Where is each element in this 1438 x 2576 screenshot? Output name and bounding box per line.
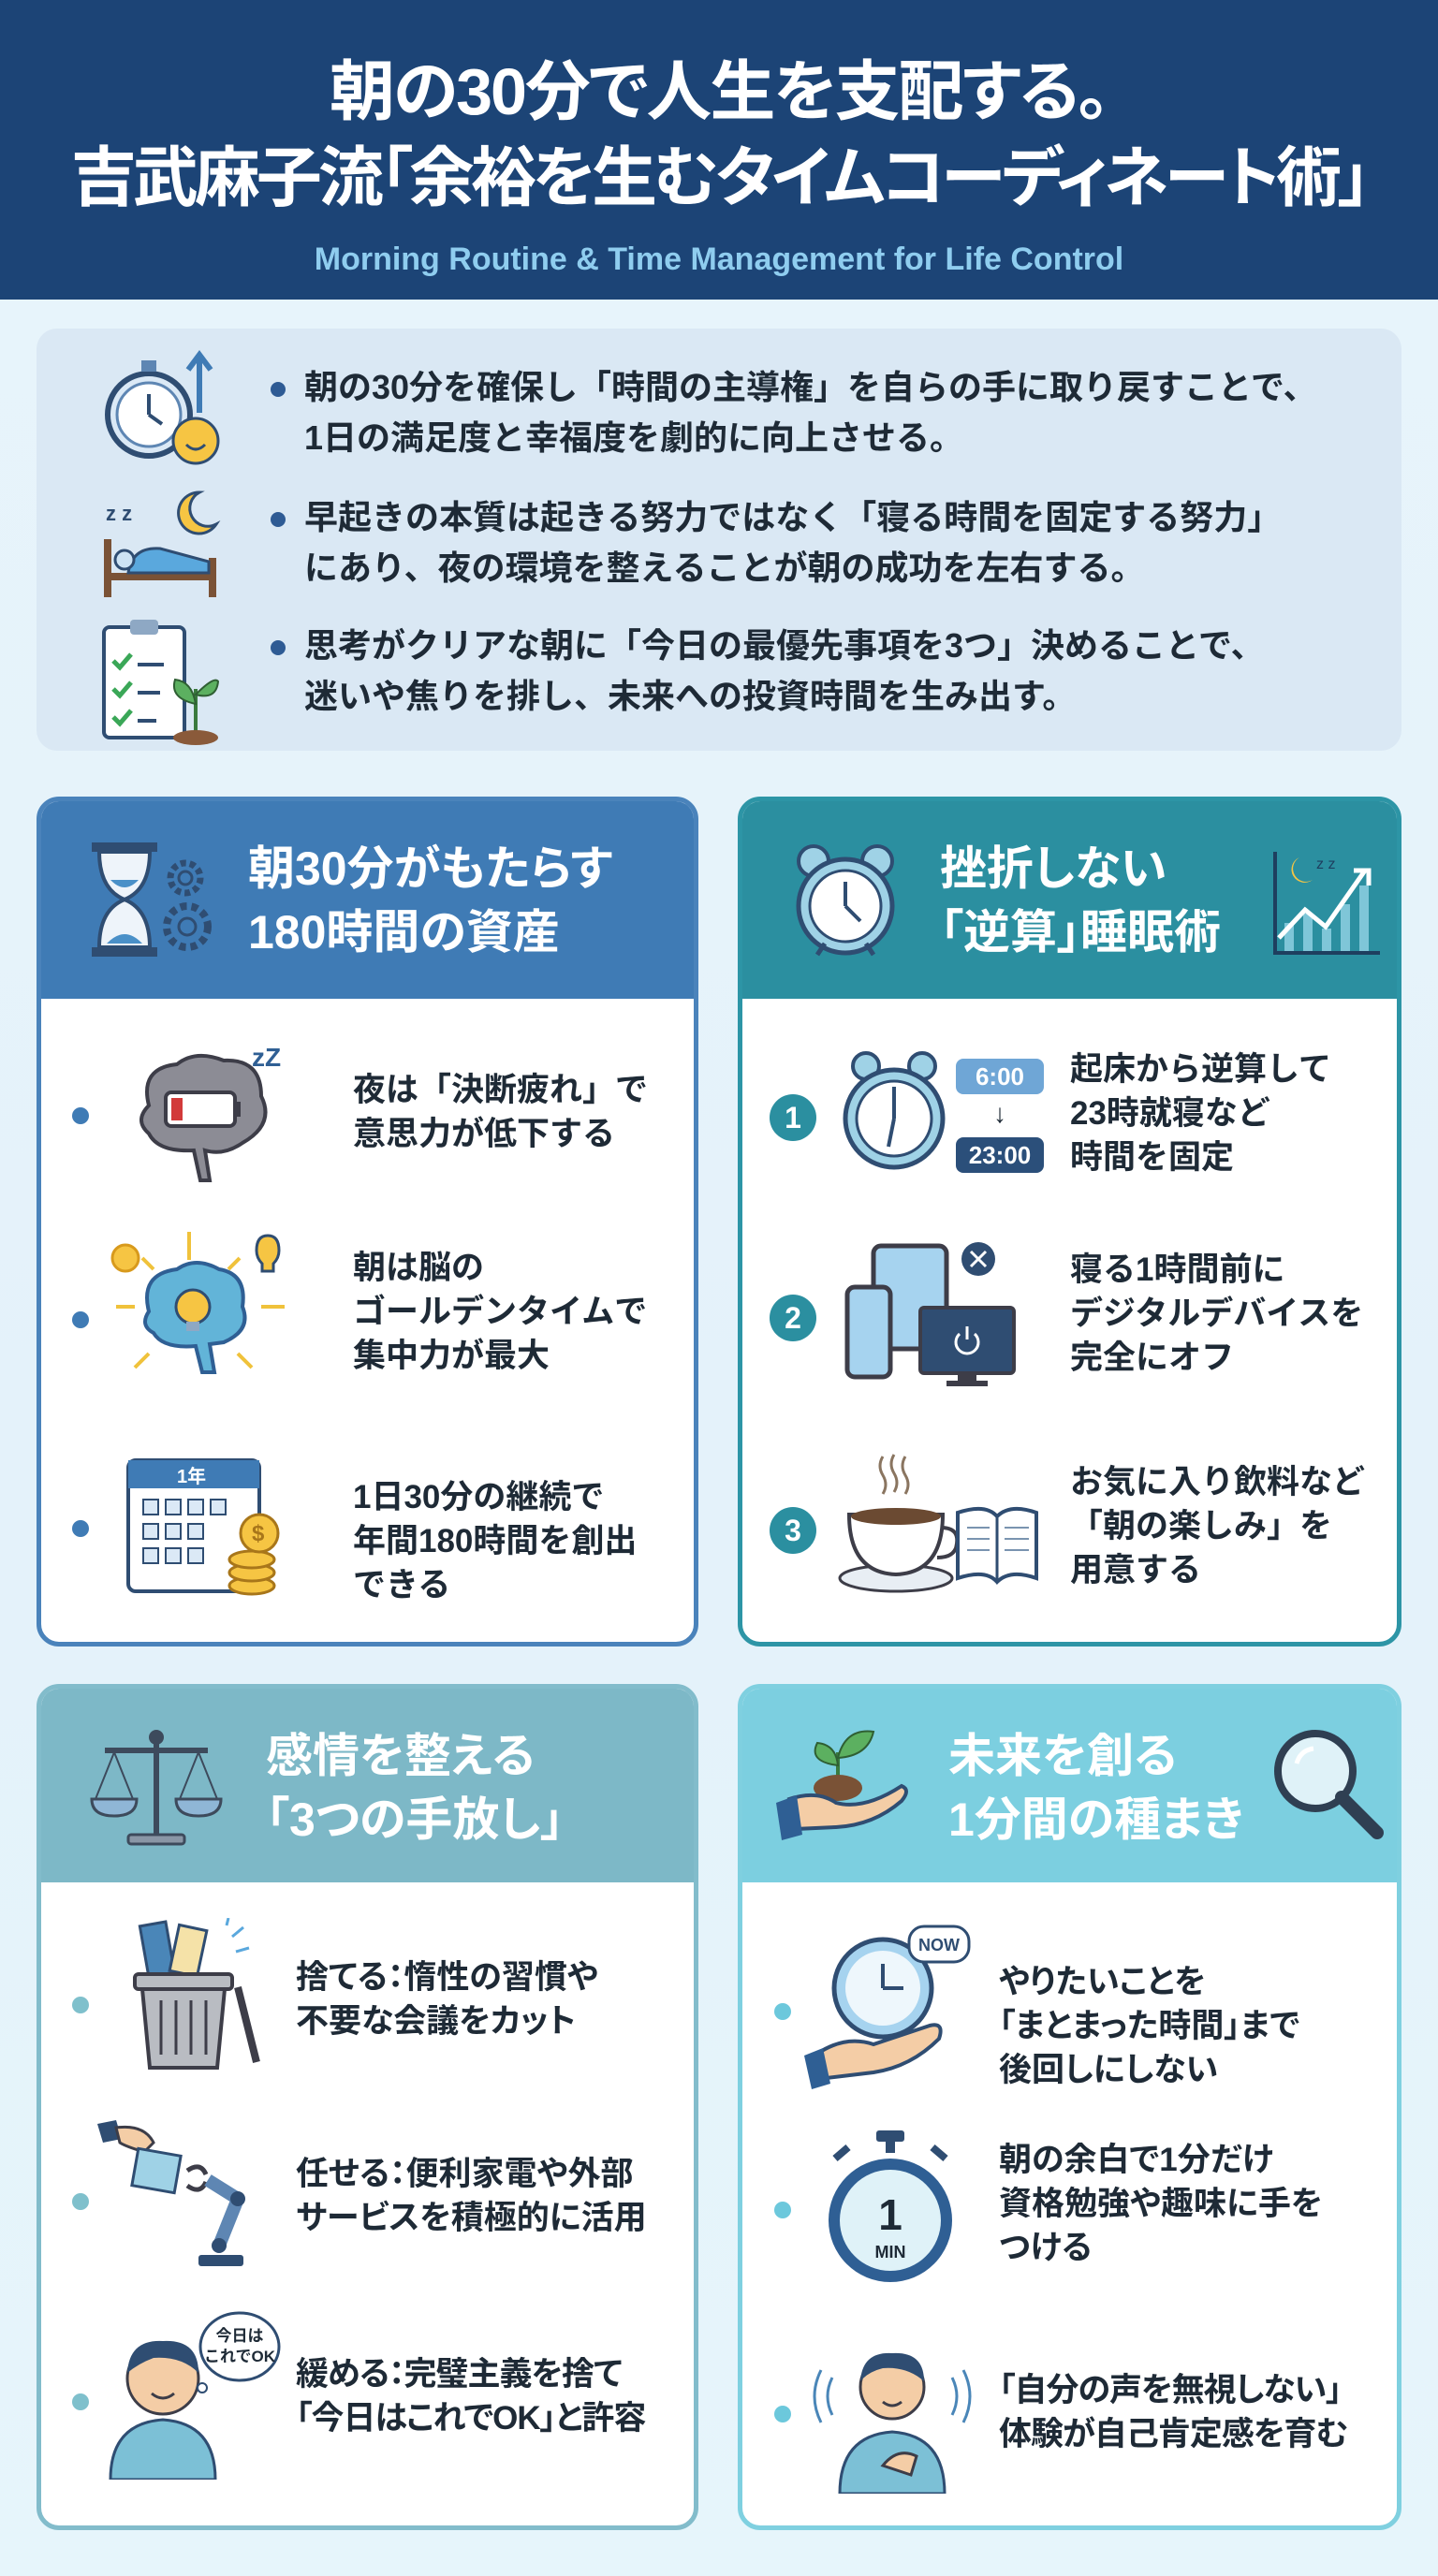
- icon: stopwatch with smile: [105, 350, 219, 464]
- item: 1 minute: 資格勉強や趣味に手を: [999, 2186, 1322, 2222]
- item: throw away: 不要な会議をカット: [296, 2003, 576, 2040]
- panel title: 朝30分がもたらす: [248, 842, 612, 895]
- panel title: 「3つの手放し」: [266, 1793, 564, 1846]
- icon: calendar with coins: [126, 1458, 279, 1595]
- icon: alarm clock: [796, 844, 895, 957]
- icon: sleep chart: z z: [1316, 856, 1335, 872]
- icon: hand to robot arm: [97, 2120, 245, 2266]
- icon: alarm with time boxes: 6:00: [976, 1062, 1024, 1090]
- icon: alarm with time boxes: 23:00: [969, 1141, 1031, 1169]
- item: decision fatigue: 夜は「決断疲れ」で: [353, 1072, 648, 1108]
- item: golden time: 集中力が最大: [353, 1338, 550, 1374]
- icon: clock in hand NOW: NOW: [918, 1936, 960, 1954]
- item 1: 起床から逆算して: [1070, 1051, 1331, 1088]
- item 1: 時間を固定: [1070, 1139, 1234, 1176]
- item: 180 hours per year: 年間180時間を創出: [353, 1523, 637, 1559]
- item: 1 minute: 朝の余白で1分だけ: [999, 2142, 1273, 2178]
- icon: alarm with time boxes: [843, 1051, 1044, 1173]
- icon: person with speech bubble: これでOK: [204, 2348, 276, 2365]
- panel: three letting-go: [37, 1684, 698, 2530]
- item 3: [770, 1454, 1365, 1593]
- item: don't postpone: 「まとまった時間」まで: [999, 2008, 1299, 2044]
- item: golden time: ゴールデンタイムで: [353, 1294, 647, 1330]
- item 3: 用意する: [1070, 1552, 1201, 1588]
- panel title: 未来を創る: [948, 1730, 1177, 1782]
- item: 1 minute: [774, 2130, 1322, 2282]
- item: decision fatigue: 意思力が低下する: [353, 1116, 615, 1152]
- panel: reverse sleep: [738, 797, 1401, 1647]
- icon: magnifying glass: [1274, 1730, 1384, 1839]
- panel header: [742, 1689, 1397, 1882]
- panel header: [41, 801, 694, 999]
- panel title: 「逆算」睡眠術: [940, 906, 1221, 959]
- item: self voice: 体験が自己肯定感を育む: [999, 2416, 1347, 2452]
- panel title: [266, 1730, 564, 1846]
- item 3: 3: [785, 1514, 801, 1547]
- bullet 3: 思考がクリアな朝に「今日の最優先事項を3つ」決めることで、: [304, 626, 1265, 665]
- panel title: [248, 842, 612, 959]
- item: 180 hours per year: できる: [353, 1567, 450, 1603]
- item: don't postpone: [774, 1925, 1299, 2089]
- icon: tired brain: [139, 1043, 281, 1182]
- item: throw away: [72, 1918, 598, 2070]
- panel: 1-minute seeding: [738, 1684, 1401, 2530]
- icon: hand holding sprout: [776, 1730, 908, 1840]
- item 2: 2: [785, 1301, 801, 1335]
- panel title: [940, 842, 1221, 959]
- item: don't postpone: やりたいことを: [999, 1964, 1206, 2000]
- icon: devices off: [844, 1242, 1016, 1386]
- icon: person hand on chest: [813, 2353, 972, 2494]
- item 3: お気に入り飲料など: [1070, 1464, 1365, 1500]
- icon: calendar with coins: 1年: [177, 1466, 206, 1487]
- header band: [0, 0, 1438, 300]
- item 1: 23時就寝など: [1070, 1095, 1270, 1132]
- item 2: 完全にオフ: [1070, 1339, 1234, 1376]
- icon: scales: [90, 1730, 223, 1846]
- item: decision fatigue: [72, 1043, 648, 1182]
- icon: bright brain with bulb: [110, 1232, 285, 1374]
- panel header: [41, 1689, 694, 1882]
- panel title: [948, 1730, 1243, 1846]
- item: delegate: サービスを積極的に活用: [296, 2200, 647, 2236]
- icon: bed with moon: [104, 490, 221, 597]
- panel: 180 hours asset: [37, 797, 698, 1647]
- icon: person with speech bubble: 今日は: [215, 2326, 264, 2345]
- item: loosen: 「今日はこれでOK」と許容: [296, 2400, 645, 2437]
- item 3: 「朝の楽しみ」を: [1070, 1508, 1332, 1544]
- icon: trash can: [133, 1918, 260, 2070]
- item 2: デジタルデバイスを: [1070, 1295, 1363, 1332]
- title line 2: 吉武麻子流「余裕を生むタイムコーディネート術」: [71, 141, 1367, 214]
- item: self voice: 「自分の声を無視しない」: [999, 2372, 1342, 2408]
- title line 1: 朝の30分で人生を支配する。: [330, 55, 1108, 128]
- icon: 1 MIN stopwatch: [829, 2130, 952, 2282]
- bullet 1: [271, 368, 1317, 457]
- bullet 1: 朝の30分を確保し「時間の主導権」を自らの手に取り戻すことで、: [304, 368, 1317, 406]
- item: 180 hours per year: [72, 1458, 637, 1603]
- item: golden time: [72, 1232, 647, 1374]
- panel header: [742, 801, 1397, 999]
- item: self voice: [774, 2353, 1347, 2494]
- item: 1 minute: つける: [999, 2230, 1092, 2266]
- icon: calendar with coins: $: [252, 1521, 265, 1546]
- icon: clock in hand NOW: [804, 1925, 970, 2089]
- item 1: 1: [785, 1101, 801, 1134]
- icon: coffee and book: [839, 1454, 1038, 1593]
- bullet 2: [271, 498, 1281, 587]
- panel title: 180時間の資産: [248, 906, 560, 959]
- item 1: [770, 1051, 1331, 1176]
- item: throw away: 捨てる：惰性の習慣や: [296, 1959, 598, 1996]
- icon: person with speech bubble: [109, 2312, 281, 2480]
- icon: hourglass and gears: [92, 842, 212, 957]
- subtitle: Morning Routine & Time Management for Life Control: [315, 242, 1123, 277]
- item: loosen: 緩める：完璧主義を捨て: [296, 2356, 622, 2393]
- bullet 2: にあり、夜の環境を整えることが朝の成功を左右する。: [304, 549, 1144, 587]
- bullet 1: 1日の満足度と幸福度を劇的に向上させる。: [304, 418, 963, 457]
- item: delegate: [72, 2120, 647, 2266]
- icon: 1 MIN stopwatch: MIN: [874, 2243, 906, 2261]
- icon: checklist with sprout: [102, 620, 219, 745]
- item: golden time: 朝は脳の: [353, 1250, 484, 1286]
- item 2: 寝る1時間前に: [1070, 1251, 1284, 1288]
- item 2: [770, 1242, 1363, 1386]
- item: don't postpone: 後回しにしない: [999, 2052, 1218, 2088]
- item: 180 hours per year: 1日30分の継続で: [353, 1479, 604, 1515]
- panel title: 挫折しない: [940, 842, 1167, 895]
- panel title: 感情を整える: [266, 1730, 535, 1782]
- panel: summary: [37, 329, 1401, 751]
- icon: alarm with time boxes: ↓: [993, 1099, 1006, 1128]
- panel title: 1分間の種まき: [948, 1793, 1243, 1846]
- icon: tired brain: zZ: [252, 1043, 281, 1072]
- bullet 2: 早起きの本質は起きる努力ではなく「寝る時間を固定する努力」: [304, 498, 1281, 536]
- item: delegate: 任せる：便利家電や外部: [296, 2156, 633, 2192]
- item: loosen: [72, 2312, 646, 2480]
- icon: 1 MIN stopwatch: 1: [878, 2190, 902, 2239]
- bullet 3: 迷いや焦りを排し、未来への投資時間を生み出す。: [304, 677, 1076, 715]
- bullet 3: [271, 626, 1265, 715]
- icon: bed with moon: z z: [106, 502, 132, 525]
- icon: sleep chart: [1273, 852, 1380, 955]
